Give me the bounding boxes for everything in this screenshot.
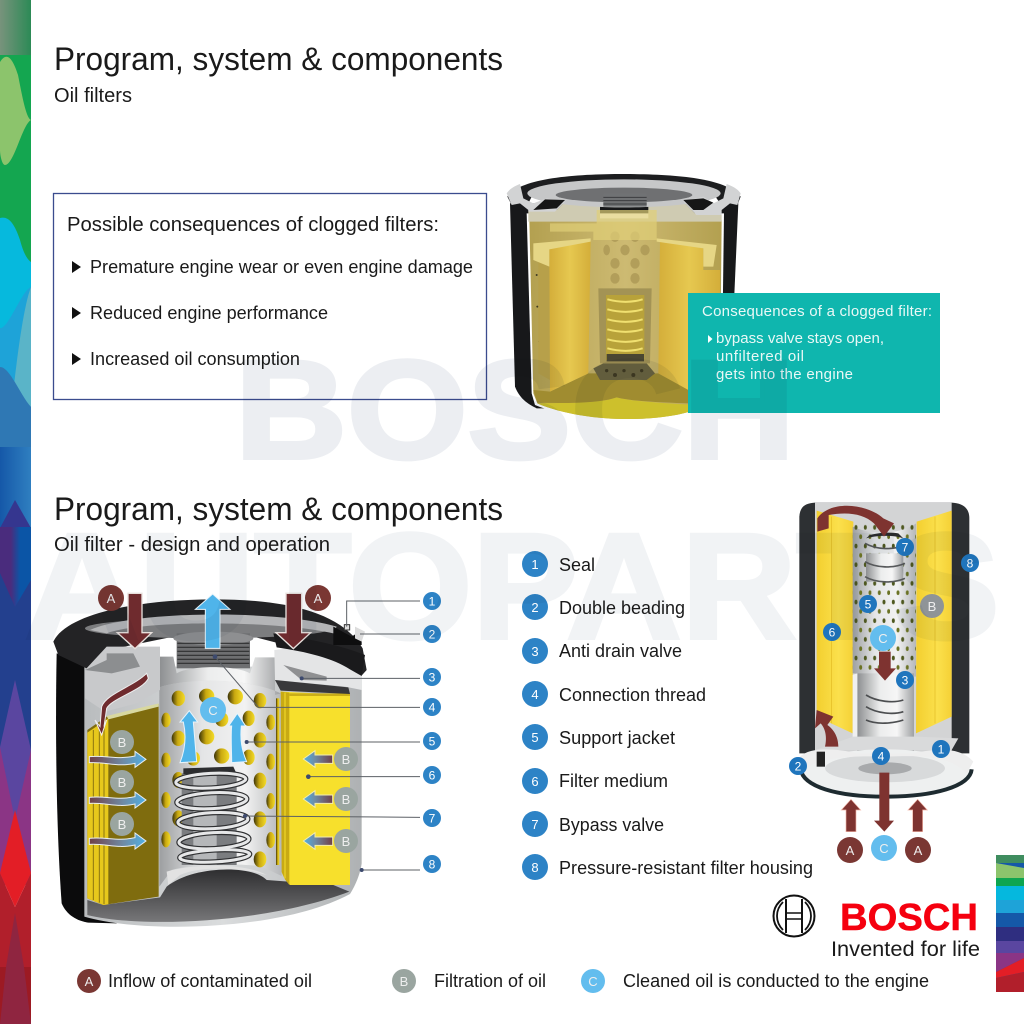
letter markers on vertical filter — [837, 594, 944, 863]
bullet 1: Premature engine wear or even engine damage — [90, 256, 473, 277]
arrows: inflow and outflow — [841, 799, 927, 832]
number markers on vertical filter: 1 — [938, 742, 945, 756]
callout: consequences of a clogged filter: gets into the engine — [716, 366, 853, 383]
illustration: vertical filter cross-section — [799, 503, 973, 832]
labels on main filter: A, B, C markers: A — [107, 591, 116, 606]
labels on main filter: A, B, C markers: B — [342, 792, 350, 807]
top plate and seal — [53, 599, 367, 712]
heading: top section — [54, 41, 503, 107]
labels on main filter: A, B, C markers: B — [118, 735, 126, 750]
housing — [799, 503, 969, 753]
arrows: filtration B, right — [303, 751, 333, 849]
labels on main filter: A, B, C markers — [98, 585, 358, 853]
item 5: 5 — [531, 730, 539, 745]
legend C: Cleaned oil is conducted to the engine — [623, 971, 929, 991]
arrow: flow over top — [817, 506, 894, 537]
item 1: Seal — [559, 555, 595, 575]
illustration: clogged oil filter cutaway — [507, 174, 741, 421]
support jacket — [159, 681, 282, 887]
base cap — [167, 866, 267, 885]
base and seal — [800, 737, 973, 797]
item 8: Pressure-resistant filter housing — [559, 858, 813, 878]
item 5 — [522, 724, 675, 750]
watermark: BOSCH — [235, 331, 795, 488]
heading: design and operation: Oil filter - design and operation — [54, 534, 330, 556]
number markers on main filter: 5 — [429, 734, 436, 748]
letter markers on vertical filter: A — [846, 843, 855, 858]
labels on main filter: A, B, C markers: B — [118, 775, 126, 790]
labels on main filter: A, B, C markers: B — [342, 834, 350, 849]
arrow: down centre — [874, 652, 896, 681]
labels on main filter: A, B, C markers: B — [118, 817, 126, 832]
number markers on vertical filter: 6 — [829, 626, 836, 640]
number markers on vertical filter: 4 — [878, 750, 885, 764]
item 2 — [522, 594, 685, 620]
number markers on vertical filter: 2 — [795, 760, 802, 774]
letter markers on vertical filter: B — [928, 599, 936, 614]
watermark: AUTOPARTS — [24, 502, 1000, 670]
heading: top section: Oil filters — [54, 85, 132, 107]
panel heading: Possible consequences of clogged filters: — [67, 214, 439, 236]
bullet 2: Reduced engine performance — [90, 302, 328, 323]
panel: possible consequences — [54, 194, 486, 400]
number markers on vertical filter — [789, 538, 979, 775]
item 3 — [522, 638, 682, 664]
number markers on main filter: 7 — [429, 812, 436, 826]
logo: Bosch: BOSCH — [840, 897, 978, 939]
letter markers on vertical filter: A — [914, 843, 923, 858]
callout: consequences of a clogged filter: Consequences of a clogged filter: — [702, 303, 932, 320]
arrow: inflow routed to filter — [95, 673, 148, 735]
item 1: 1 — [531, 557, 539, 572]
number markers on main filter — [423, 592, 441, 873]
number markers on vertical filter: 5 — [865, 598, 872, 612]
filter medium: right — [281, 692, 350, 885]
arrows: filtration B, left — [89, 751, 146, 849]
item 8: 8 — [531, 860, 539, 875]
decorative colour swatch: right — [996, 855, 1024, 992]
support jacket — [853, 523, 916, 677]
legend — [77, 969, 929, 993]
item 7: Bypass valve — [559, 815, 664, 835]
item 5: Support jacket — [559, 728, 675, 748]
letter markers on vertical filter: C — [879, 841, 889, 856]
heading: design and operation: Program, system & components — [54, 491, 503, 527]
filter medium: left — [87, 703, 159, 905]
item 4: Connection thread — [559, 685, 706, 705]
item 3: Anti drain valve — [559, 641, 682, 661]
callout: consequences of a clogged filter: bypass valve stays open, — [716, 330, 884, 347]
item 4: 4 — [531, 687, 539, 702]
icon: Bosch armature — [774, 896, 814, 936]
item 2: 2 — [531, 600, 539, 615]
logo: Bosch — [774, 896, 980, 961]
number markers on main filter: 4 — [429, 700, 436, 714]
item 7 — [522, 811, 664, 837]
item 3: 3 — [531, 644, 539, 659]
number markers on main filter: 2 — [429, 628, 436, 642]
lower valve — [853, 673, 914, 753]
leader lines — [215, 601, 420, 870]
legend B — [392, 969, 546, 993]
item 4 — [522, 681, 706, 707]
arrow: clean oil out — [195, 594, 230, 648]
legend B: B — [400, 974, 408, 989]
labels on main filter: A, B, C markers: C — [208, 703, 218, 718]
legend B: Filtration of oil — [434, 971, 546, 991]
number markers on vertical filter: 8 — [967, 556, 974, 570]
item 6: Filter medium — [559, 771, 668, 791]
watermark — [24, 331, 1000, 670]
parts list — [522, 551, 813, 880]
item 7: 7 — [531, 817, 539, 832]
arrow: inlet curl — [815, 710, 838, 747]
number markers on main filter: 1 — [429, 594, 436, 608]
arrows: clean oil inside — [180, 711, 247, 763]
legend C: C — [588, 974, 598, 989]
heading: design and operation — [54, 491, 503, 556]
labels on main filter: A, B, C markers: B — [342, 752, 350, 767]
item 2: Double beading — [559, 598, 685, 618]
legend A: Inflow of contaminated oil — [108, 971, 312, 991]
number markers on vertical filter: 3 — [902, 674, 909, 688]
bypass valve — [865, 533, 905, 582]
number markers on vertical filter: 7 — [902, 540, 909, 554]
item 1 — [522, 551, 595, 577]
callout: consequences of a clogged filter — [688, 293, 940, 413]
illustration: main oil filter cutaway — [53, 593, 420, 927]
item 8 — [522, 854, 813, 880]
number markers on main filter: 6 — [429, 768, 436, 782]
housing — [56, 653, 362, 927]
letter markers on vertical filter: C — [878, 631, 888, 646]
heading: top section: Program, system & components — [54, 41, 503, 77]
item 6: 6 — [531, 774, 539, 789]
callout: consequences of a clogged filter: unfiltered oil — [716, 348, 804, 365]
bypass valve — [175, 767, 250, 865]
number markers on main filter: 3 — [429, 670, 436, 684]
leader dots — [213, 654, 364, 872]
bullet 3: Increased oil consumption — [90, 348, 300, 369]
legend A: A — [85, 974, 94, 989]
arrows: inflow A — [117, 593, 311, 649]
logo: Bosch: Invented for life — [831, 938, 980, 961]
item 6 — [522, 768, 668, 794]
decorative colour strip: left — [0, 0, 31, 1024]
number markers on main filter: 8 — [429, 858, 436, 872]
labels on main filter: A, B, C markers: A — [314, 591, 323, 606]
filter medium — [817, 511, 952, 733]
